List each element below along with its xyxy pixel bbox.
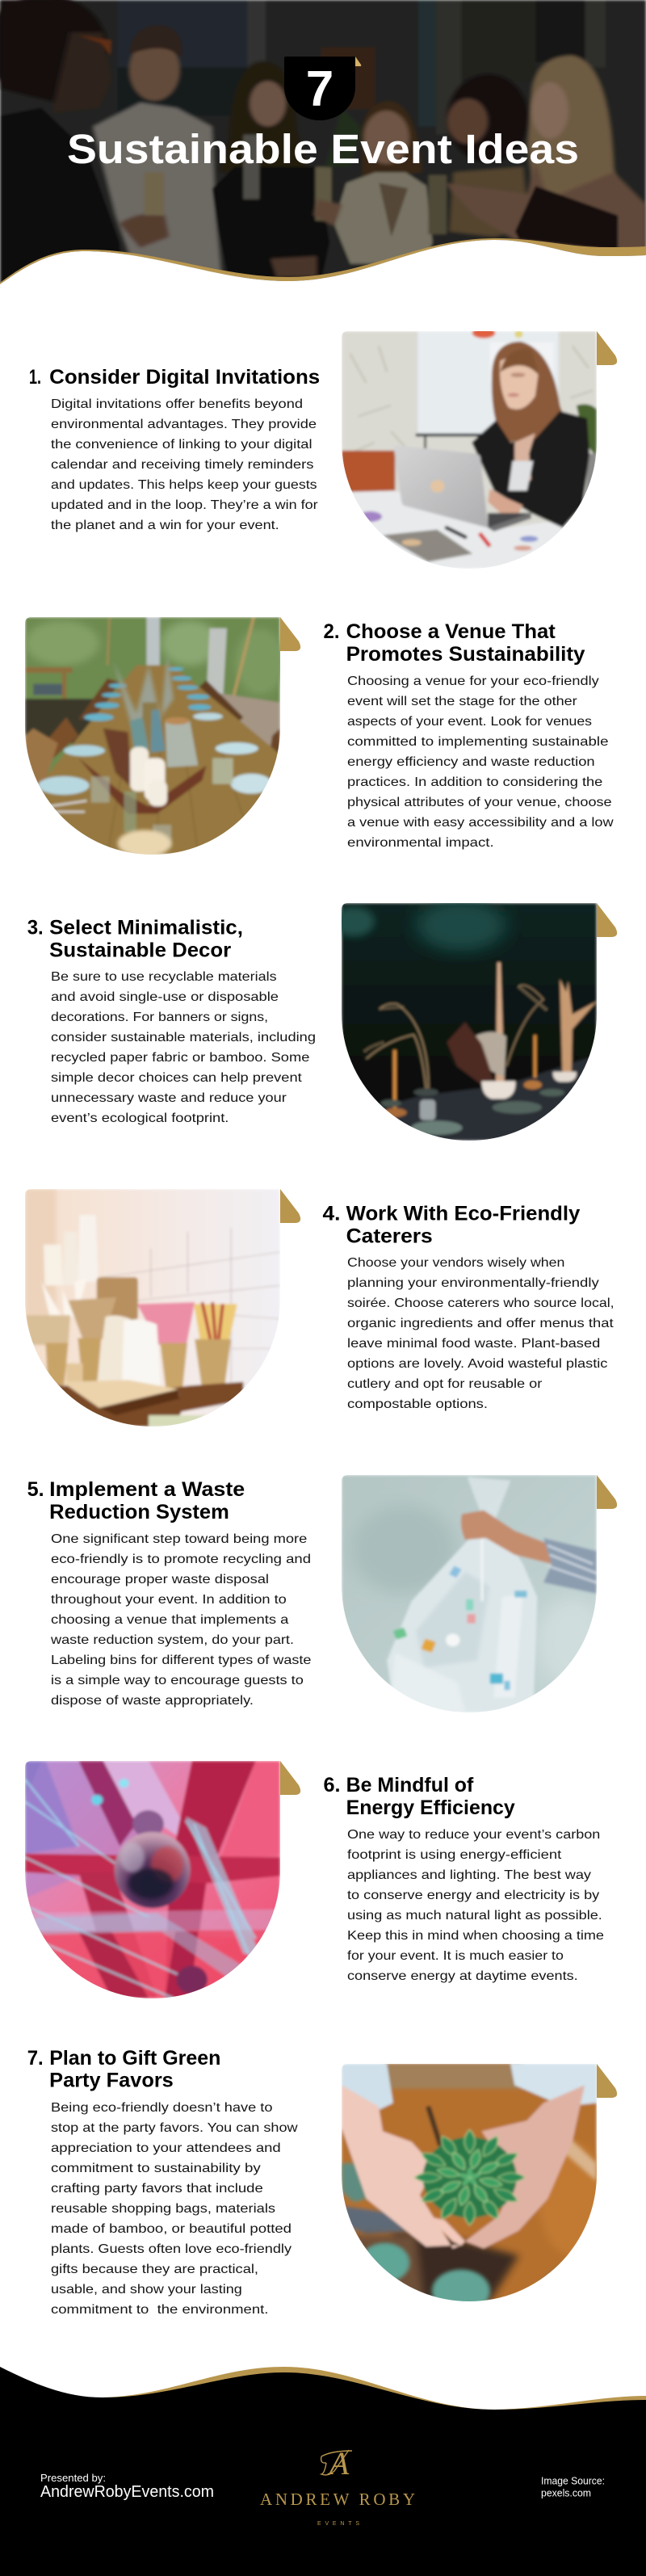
panel: tip 5 waste (27, 1475, 617, 1712)
body text: One way to reduce your event’s carbon (347, 1828, 600, 1842)
logo monogram: A (327, 2445, 350, 2481)
body text: Being eco-friendly doesn’t have to (51, 2101, 273, 2115)
body text: waste reduction system, do your part. (50, 1633, 294, 1647)
body text: event’s ecological footprint. (51, 1112, 229, 1125)
header photo: guests toasting (0, 0, 646, 285)
heading: Promotes Sustainability (346, 643, 585, 666)
white cup stacks (97, 1316, 133, 1382)
body text: Be sure to use recyclable materials (51, 970, 277, 984)
bottle caps (393, 1628, 407, 1640)
panel: tip 4 caterers (25, 1189, 615, 1427)
pots (481, 1081, 515, 1099)
pen and marker (447, 527, 465, 537)
image source (541, 2475, 605, 2499)
gold tab (597, 903, 617, 937)
body text: appreciation to your attendees and (51, 2141, 281, 2155)
man at left (0, 0, 107, 97)
hands (488, 489, 522, 513)
body text: plants. Guests often love eco-friendly (51, 2242, 292, 2256)
heading (323, 1774, 515, 1819)
body text: to conserve energy and electricity is by (347, 1889, 599, 1902)
body text: gifts because they are practical, (51, 2263, 258, 2276)
keyboard base (488, 513, 531, 527)
photo: paper cups and straws (25, 1189, 280, 1427)
heading (323, 1202, 580, 1247)
body text: aspects of your event. Look for venues (347, 715, 592, 729)
panel: tip 7 favors (27, 2047, 617, 2317)
wooden board (97, 1277, 138, 1320)
disco ball (115, 1832, 191, 1908)
heading (27, 2047, 220, 2092)
blurred foreground (342, 2163, 367, 2202)
body text (347, 1828, 604, 1983)
jacket (472, 411, 589, 527)
body text: decorations. For banners or signs, (51, 1011, 268, 1024)
laptop lid (393, 445, 489, 527)
logo wordmark: ANDREW ROBY (260, 2490, 415, 2509)
body text: usable, and show your lasting (51, 2283, 242, 2297)
table (383, 1056, 589, 1141)
footer black wave (0, 2367, 646, 2576)
body text: calendar and receiving timely reminders (51, 458, 313, 472)
gold tab (280, 617, 300, 651)
heading: Energy Efficiency (346, 1796, 515, 1819)
body text: encourage proper waste disposal (51, 1573, 269, 1586)
body text: the planet and a win for your event. (51, 519, 279, 532)
heading: Plan to Gift Green (49, 2047, 220, 2070)
body text: cutlery and opt for reusable or (347, 1377, 543, 1391)
gold tab (597, 1475, 617, 1509)
body text: committed to implementing sustainable (347, 735, 609, 749)
heading: 6. (323, 1774, 341, 1796)
table top (25, 666, 280, 855)
body text: Labeling bins for different types of waste (51, 1654, 312, 1667)
body text: for your event. It is much easier to (347, 1949, 564, 1963)
body text: energy efficiency and waste reduction (347, 755, 595, 769)
chair (342, 451, 395, 492)
body text: commitment to the environment. (51, 2303, 268, 2317)
tree behind (329, 114, 359, 166)
panel: tip 1 digital invitations (29, 328, 617, 569)
gold tab (597, 2064, 617, 2098)
header (0, 0, 646, 284)
body text: is a simple way to encourage guests to (51, 1674, 304, 1687)
photo: woman at laptop (342, 328, 597, 569)
body text: leave minimal food waste. Plant-based (347, 1337, 600, 1351)
body text: unnecessary waste and reduce your (51, 1091, 287, 1105)
body text: updated and in the loop. They’re a win for (51, 498, 318, 512)
pink straws (137, 1302, 195, 1345)
striped straws (194, 1304, 237, 1341)
gold tab (280, 1189, 300, 1223)
chairs (78, 679, 120, 719)
heading (27, 1478, 245, 1523)
heading: Reduction System (49, 1501, 229, 1523)
gold tab (280, 1761, 300, 1795)
number 7: 7 (306, 61, 333, 117)
man in shirt (93, 103, 223, 285)
body text: crafting party favors that include (51, 2182, 263, 2196)
badge tab (355, 57, 361, 66)
heading: Be Mindful of (346, 1774, 474, 1796)
body text: recycled paper fabric or bamboo. Some (51, 1051, 310, 1065)
kraft cups (46, 1343, 69, 1385)
heading: 3. (27, 916, 44, 939)
heading: 7. (27, 2047, 44, 2070)
heading: 4. (323, 1202, 341, 1225)
body text: eco-friendly is to promote recycling and (51, 1553, 311, 1566)
footer (0, 2367, 646, 2576)
body text (51, 970, 316, 1125)
photo: hands holding succulent (342, 2064, 606, 2313)
woman in black dress (218, 61, 309, 172)
bag (468, 1477, 510, 1521)
plates (167, 667, 183, 671)
heading: Sustainable Decor (49, 939, 231, 961)
body text: reusable shopping bags, materials (51, 2202, 275, 2216)
face (500, 357, 539, 410)
heading: Consider Digital Invitations (49, 366, 320, 389)
presented by: AndrewRobyEvents.com (40, 2483, 214, 2501)
body text: and avoid single-use or disposable (51, 990, 279, 1004)
white sticks (41, 1278, 87, 1317)
heading: 2. (323, 620, 339, 643)
body text: choosing a venue that implements a (51, 1613, 289, 1627)
woman in white blazer (362, 101, 422, 178)
body text: physical attributes of your venue, choose (347, 796, 612, 809)
wooden sticks (69, 1297, 116, 1339)
panel: tip 6 energy (25, 1761, 604, 1998)
photo: dark table with dried plants (333, 899, 597, 1141)
logo events: EVENTS (317, 2521, 359, 2527)
photo: long outdoor table (25, 617, 284, 857)
light beams (25, 1780, 256, 1998)
image source: Image Source: (541, 2475, 605, 2486)
heading (27, 916, 243, 961)
body text: event will set the stage for the other (347, 695, 577, 708)
panel: tip 3 decor (27, 899, 617, 1141)
footer gold wave (103, 2367, 646, 2411)
body text: conserve energy at daytime events. (347, 1969, 578, 1983)
body text: dispose of waste appropriately. (51, 1694, 254, 1708)
tile lines (97, 1228, 280, 1382)
heading: Work With Eco-Friendly (346, 1202, 580, 1225)
body text (50, 1532, 312, 1708)
body text (51, 397, 318, 532)
body text: stop at the party favors. You can show (51, 2121, 298, 2135)
body text: commitment to sustainability by (51, 2162, 261, 2175)
heading: Select Minimalistic, (49, 916, 243, 939)
plates (493, 1101, 542, 1114)
heading: 5. (27, 1478, 44, 1501)
body text: simple decor choices can help prevent (51, 1071, 302, 1085)
gold tab (597, 331, 617, 365)
body text: planning your environmentally-friendly (347, 1276, 599, 1290)
table (351, 488, 571, 569)
heading: Party Favors (49, 2070, 174, 2092)
body text: and updates. This helps keep your guests (51, 478, 317, 492)
panel: tip 2 venue (25, 617, 614, 857)
body text: environmental advantages. They provide (51, 418, 317, 431)
body text: Keep this in mind when choosing a time (347, 1929, 604, 1943)
heading: Caterers (346, 1225, 433, 1247)
body text: the convenience of linking to your digital (51, 438, 312, 452)
shelf (33, 1378, 243, 1427)
arms and hands (342, 2085, 461, 2248)
ceiling mount (132, 1810, 164, 1838)
presented by (40, 2472, 214, 2501)
body text: Digital invitations offer benefits beyond (51, 397, 303, 411)
body text: soirée. Choose caterers who source local, (347, 1296, 615, 1310)
photo: recycling bag held up (342, 1475, 610, 1712)
logo (260, 2445, 415, 2527)
blonde woman (523, 53, 617, 197)
plant (577, 404, 597, 457)
gold wave (0, 238, 646, 284)
body text: One significant step toward being more (51, 1532, 307, 1546)
body text: Choosing a venue for your eco-friendly (347, 674, 599, 688)
body text: organic ingredients and offer menus that (347, 1317, 614, 1330)
body text: throughout your event. In addition to (51, 1593, 287, 1607)
curly-haired woman (447, 74, 530, 163)
number badge (284, 57, 361, 120)
presented by: Presented by: (40, 2472, 106, 2484)
centerpiece (114, 658, 176, 725)
body text: environmental impact. (347, 836, 494, 850)
forks (25, 1315, 70, 1345)
paper cups stacked (78, 1215, 99, 1282)
body text: Choose your vendors wisely when (347, 1256, 564, 1270)
badge shield (284, 57, 355, 120)
image source: pexels.com (541, 2488, 591, 2499)
body text: using as much natural light as possible. (347, 1909, 602, 1923)
body text: a venue with easy accessibility and a low (347, 816, 614, 830)
heading (323, 620, 585, 666)
arm and hand (461, 1511, 552, 1564)
photo: disco ball (25, 1761, 280, 1998)
heading: 1. (29, 366, 41, 389)
succulent (414, 2129, 525, 2225)
white wave (0, 240, 646, 339)
sleeves (342, 2064, 393, 2110)
body text: compostable options. (347, 1397, 488, 1411)
flowers and fan (473, 1032, 506, 1078)
body text (51, 2101, 298, 2317)
body text: made of bamboo, or beautiful potted (51, 2222, 292, 2236)
heading: Choose a Venue That (346, 620, 556, 643)
body text: footprint is using energy-efficient (347, 1848, 562, 1862)
body text: options are lovely. Avoid wasteful plastic (347, 1357, 607, 1371)
body text: consider sustainable materials, including (51, 1031, 316, 1044)
logo monogram (321, 2445, 352, 2481)
closed laptop (383, 530, 472, 562)
heading: Implement a Waste (49, 1478, 245, 1501)
hair back (492, 342, 568, 443)
title: Sustainable Event Ideas (67, 126, 579, 172)
sleeve (543, 1538, 597, 1594)
interior floor (25, 697, 94, 745)
body text: practices. In addition to considering the (347, 775, 602, 789)
body text (347, 1256, 615, 1411)
body text (347, 674, 614, 850)
body text: appliances and lighting. The best way (347, 1868, 591, 1882)
stems (380, 1004, 429, 1089)
